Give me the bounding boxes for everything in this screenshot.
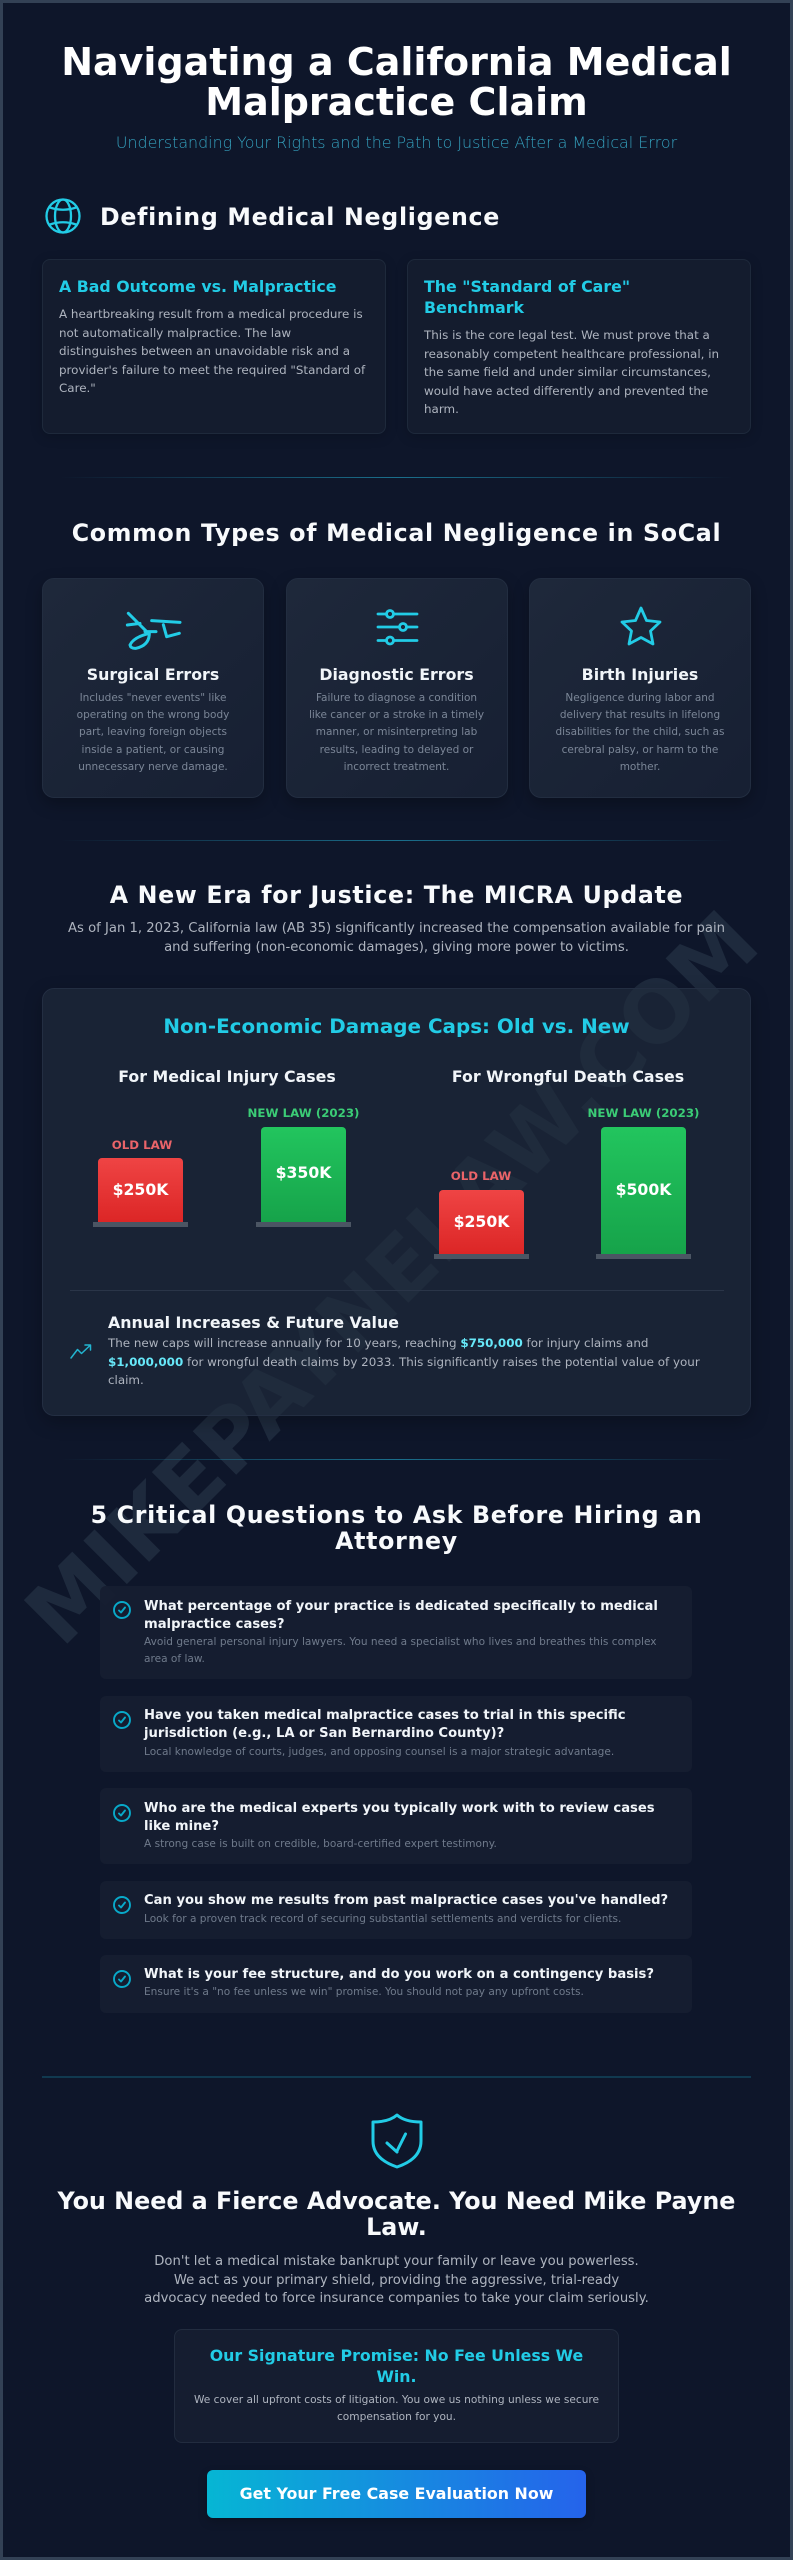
- closing text: [144, 2254, 649, 2306]
- closing text: We act as your primary shield, providing the aggressive, trial-ready: [174, 2272, 619, 2288]
- answer text: A strong case is built on credible, board-certified expert testimony.: [144, 1838, 497, 1850]
- promise text: compensation for you.: [337, 2411, 456, 2423]
- icon: check: [113, 1711, 131, 1729]
- card text: delivery that results in lifelong: [560, 709, 720, 721]
- title: [61, 40, 732, 124]
- card text: not automatically malpractice. The law: [59, 326, 291, 340]
- card text: operating on the wrong body: [77, 709, 229, 721]
- heading: fierce advocate: [57, 2187, 735, 2241]
- answer text: Avoid general personal injury lawyers. You need a specialist who lives and breathes this complex: [144, 1636, 657, 1648]
- subtitle: Understanding Your Rights and the Path to Justice After a Medical Error: [116, 133, 677, 152]
- button: free case evaluation: [207, 2470, 586, 2518]
- icon: star: [620, 606, 662, 646]
- heading: critical questions: [91, 1501, 702, 1555]
- question text: like mine?: [144, 1819, 219, 1834]
- card text: inside a patient, or causing: [82, 744, 224, 756]
- panel: surgical errors: [42, 578, 264, 798]
- chart title: For Medical Injury Cases: [118, 1067, 336, 1086]
- title: Malpractice Claim: [205, 80, 588, 124]
- annual increases text: claim.: [108, 1373, 144, 1387]
- button: free case evaluation: Get Your Free Case Evaluation Now: [240, 2484, 553, 2503]
- value: $250K: [113, 1180, 168, 1199]
- question text: [144, 1800, 655, 1834]
- question text: Who are the medical experts you typically work with to review cases: [144, 1800, 655, 1816]
- heading: critical questions: Attorney: [335, 1527, 458, 1555]
- card text: Failure to diagnose a condition: [316, 692, 477, 704]
- card text: mother.: [620, 761, 660, 773]
- question text: [144, 1598, 658, 1632]
- question 3: [100, 1788, 692, 1864]
- question 5: [100, 1955, 692, 2013]
- question text: Have you taken medical malpractice cases to trial in this specific: [144, 1708, 626, 1723]
- question text: jurisdiction (e.g., LA or San Bernardino County)?: [144, 1726, 504, 1741]
- icon: scissors: [126, 612, 182, 650]
- card text: manner, or misinterpreting lab: [316, 726, 477, 738]
- annual increases heading: Annual Increases & Future Value: [108, 1313, 399, 1332]
- promise text: [194, 2394, 599, 2423]
- annual increases text: $1,000,000 for wrongful death claims by 2033. This significantly raises the potential value of your: [108, 1354, 700, 1368]
- value: $250K: [454, 1212, 509, 1231]
- panel: signature promise: [174, 2329, 619, 2443]
- closing text: advocacy needed to force insurance companies to take your claim seriously.: [144, 2291, 649, 2306]
- answer text: area of law.: [144, 1653, 205, 1665]
- icon: check: [113, 1601, 131, 1619]
- card text: unnecessary nerve damage.: [78, 761, 228, 773]
- bar: new law 500K: [601, 1127, 686, 1254]
- annual increases text: The new caps will increase annually for 10 years, reaching $750,000 for injury claims and: [108, 1336, 648, 1350]
- promise heading: Our Signature Promise: No Fee Unless We: [210, 2346, 583, 2365]
- card text: cerebral palsy, or harm to the: [562, 744, 718, 756]
- card text: like cancer or a stroke in a timely: [309, 709, 484, 721]
- heading: fierce advocate: Law.: [366, 2213, 427, 2241]
- promise heading: Win.: [376, 2367, 417, 2386]
- bar: old law 250K: [439, 1190, 524, 1254]
- card text: reasonably competent healthcare professional, in: [424, 346, 719, 360]
- question text: What percentage of your practice is dedicated specifically to medical: [144, 1598, 658, 1614]
- old law label: OLD LAW: [451, 1169, 511, 1183]
- bar: new law 350K: [261, 1127, 346, 1222]
- card text: harm.: [424, 402, 459, 416]
- title: Navigating a California Medical: [61, 40, 732, 84]
- MICRA intro text: and suffering (non-economic damages), giving more power to victims.: [164, 940, 629, 954]
- card heading: The "Standard of Care": [424, 277, 630, 296]
- bar base: [434, 1254, 529, 1259]
- icon: check: [113, 1896, 131, 1914]
- question 2: [100, 1696, 692, 1772]
- heading: common types: Common Types of Medical Negligence in SoCal: [72, 519, 721, 547]
- card text: distinguishes between an unavoidable risk and a: [59, 344, 350, 358]
- card text: [424, 328, 719, 416]
- chart: medical injury: [93, 1067, 359, 1227]
- promise text: We cover all upfront costs of litigation. You owe us nothing unless we secure: [194, 2394, 599, 2406]
- watermark: MIKEPAYNELAW.COM: [7, 893, 777, 1663]
- answer text: Look for a proven track record of securing substantial settlements and verdicts for clients.: [144, 1912, 621, 1924]
- card title: Diagnostic Errors: [319, 665, 474, 684]
- old law label: OLD LAW: [112, 1138, 172, 1152]
- bar: old law 250K: [98, 1158, 183, 1222]
- panel: diagnostic errors: [286, 578, 508, 798]
- panel: bad outcome vs malpractice: [42, 259, 386, 434]
- question text: malpractice cases?: [144, 1617, 285, 1632]
- card heading: Benchmark: [424, 298, 524, 317]
- card text: Care.": [59, 381, 96, 395]
- card text: incorrect treatment.: [344, 761, 449, 773]
- question text: What is your fee structure, and do you work on a contingency basis?: [144, 1967, 654, 1982]
- card text: This is the core legal test. We must prove that a: [424, 328, 710, 342]
- card text: Negligence during labor and: [565, 692, 715, 704]
- heading: defining medical negligence: Defining Medical Negligence: [100, 203, 500, 231]
- card text: would have acted differently and prevented the: [424, 384, 708, 398]
- card text: the same field and under similar circumstances,: [424, 365, 711, 379]
- heading: MICRA update: A New Era for Justice: The MICRA Update: [110, 881, 683, 909]
- question text: Can you show me results from past malpractice cases you've handled?: [144, 1893, 668, 1908]
- answer text: Ensure it's a "no fee unless we win" promise. You should not pay any upfront costs.: [144, 1986, 584, 1998]
- new law label: NEW LAW (2023): [588, 1106, 699, 1120]
- card text: disabilities for the child, such as: [556, 726, 724, 738]
- panel heading: Non-Economic Damage Caps: Old vs. New: [163, 1015, 630, 1038]
- MICRA intro text: [68, 921, 725, 954]
- card text: [556, 692, 724, 773]
- card heading: [424, 277, 630, 317]
- card heading: A Bad Outcome vs. Malpractice: [59, 277, 337, 296]
- card text: Includes "never events" like: [80, 692, 226, 704]
- question 4: [100, 1881, 692, 1939]
- icon: trend up: [70, 1344, 92, 1359]
- card title: Birth Injuries: [582, 665, 698, 684]
- card text: provider's failure to meet the required "Standard of: [59, 362, 365, 376]
- bar base: [93, 1222, 188, 1227]
- answer text: [144, 1636, 657, 1665]
- answer text: Local knowledge of courts, judges, and opposing counsel is a major strategic advantage.: [144, 1746, 614, 1758]
- card text: [59, 307, 366, 395]
- card text: A heartbreaking result from a medical procedure is: [59, 307, 363, 321]
- icon: check: [113, 1804, 131, 1822]
- promise heading: [210, 2346, 583, 2386]
- icon: sliders: [376, 609, 418, 646]
- chart: wrongful death: [434, 1067, 699, 1259]
- MICRA intro text: As of Jan 1, 2023, California law (AB 35) significantly increased the compensation available for pain: [68, 921, 725, 936]
- chart title: For Wrongful Death Cases: [452, 1067, 684, 1086]
- value: $500K: [616, 1180, 671, 1199]
- card text: [77, 692, 229, 773]
- card text: results, leading to delayed or: [320, 744, 473, 756]
- card text: part, leaving foreign objects: [79, 726, 227, 738]
- heading: fierce advocate: You Need a Fierce Advocate. You Need Mike Payne: [58, 2187, 735, 2215]
- question text: [144, 1708, 626, 1741]
- panel: birth injuries: [529, 578, 751, 798]
- card title: Surgical Errors: [87, 665, 219, 684]
- question 1: [100, 1586, 692, 1679]
- panel: damage caps: [42, 988, 751, 1416]
- heading: critical questions: 5 Critical Questions to Ask Before Hiring an: [91, 1501, 702, 1529]
- annual increases text: [108, 1336, 700, 1387]
- bar base: [596, 1254, 691, 1259]
- icon: shield check: [372, 2114, 422, 2168]
- value: $350K: [276, 1163, 331, 1182]
- closing text: Don't let a medical mistake bankrupt your family or leave you powerless.: [154, 2254, 639, 2269]
- new law label: NEW LAW (2023): [248, 1106, 359, 1120]
- icon: check: [113, 1970, 131, 1988]
- bar base: [256, 1222, 351, 1227]
- icon: globe: [45, 198, 81, 234]
- card text: [309, 692, 484, 773]
- panel: standard of care: [407, 259, 751, 434]
